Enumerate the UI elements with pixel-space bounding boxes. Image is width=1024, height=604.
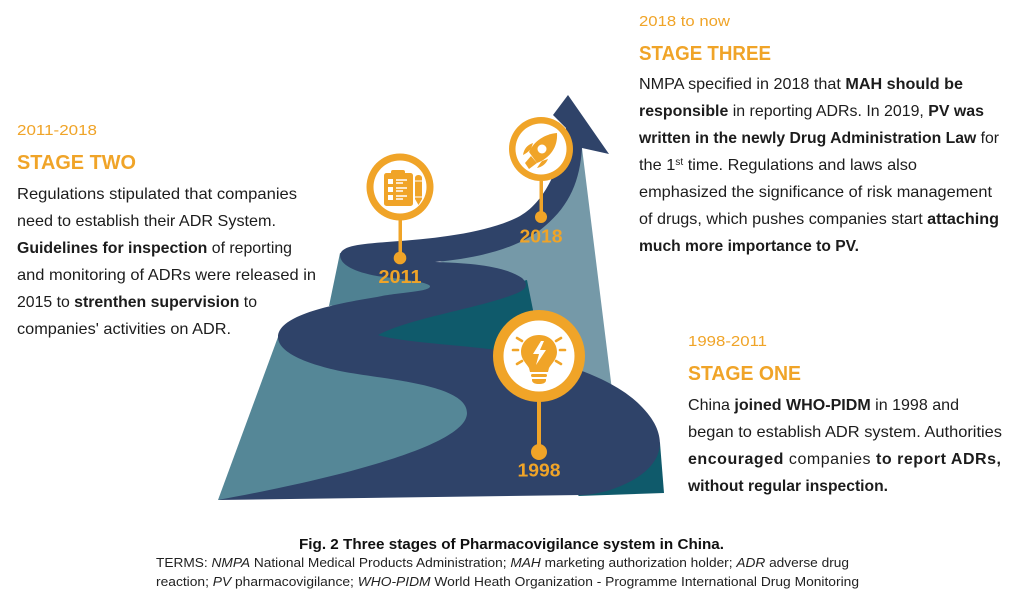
figure caption: TERMS: NMPA National Medical Products Administration; MAH marketing authorization holder; ADR adverse drug: [156, 555, 849, 570]
figure caption: Fig. 2 Three stages of Pharmacovigilance system in China.: [299, 537, 724, 553]
stage one text: without regular inspection.: [687, 478, 888, 495]
stage three text: the 1: [639, 157, 675, 174]
back light slope: [440, 148, 612, 390]
pin: 2018 rocket: [509, 117, 573, 223]
stage two text: companies' activities on ADR.: [17, 321, 231, 338]
stage one text: 1998-2011: [688, 333, 767, 350]
stage three text: emphasized the significance of risk management: [639, 184, 993, 201]
year labels: 2011: [378, 267, 422, 287]
year labels: [378, 226, 562, 480]
icon: light bulb: [513, 335, 565, 384]
road illustration: [218, 95, 664, 500]
winding road with arrow: [218, 95, 660, 500]
stage one text: encouraged companies to report ADRs,: [688, 451, 1001, 468]
stage two text: [17, 122, 316, 338]
dark teal right slope: [578, 430, 664, 496]
upper left teal slope: [329, 253, 440, 306]
stage one text: China joined WHO-PIDM in 1998 and: [688, 397, 959, 414]
pin: 2011 clipboard: [366, 154, 434, 264]
year labels: 2018: [520, 226, 562, 246]
stage two text: Regulations stipulated that companies: [17, 186, 297, 203]
lower left teal slope: [218, 337, 490, 500]
stage two text: STAGE TWO: [17, 152, 136, 174]
stage three text: 2018 to now: [639, 13, 730, 30]
stage one text: [687, 333, 1002, 495]
stage two text: and monitoring of ADRs were released in: [17, 267, 316, 284]
dark teal middle slope: [370, 280, 545, 362]
stage three text: STAGE THREE: [639, 43, 771, 65]
stage three text: NMPA specified in 2018 that MAH should be: [639, 76, 963, 93]
pin: 1998 bulb: [493, 310, 585, 460]
stage three text: responsible in reporting ADRs. In 2019, PV was: [639, 103, 984, 120]
stage three text: st: [675, 157, 683, 168]
stage three text: much more importance to PV.: [639, 238, 859, 255]
stage two text: Guidelines for inspection of reporting: [17, 240, 292, 257]
stage three text: [638, 13, 1000, 255]
year labels: 1998: [518, 460, 560, 480]
stage three text: written in the newly Drug Administration Law for: [638, 130, 1000, 147]
stage three text: time. Regulations and laws also: [683, 157, 917, 174]
stage two text: 2011-2018: [17, 122, 97, 139]
figure caption: [156, 537, 859, 589]
icon: clipboard and pencil: [384, 170, 422, 206]
icon: rocket: [523, 133, 557, 169]
stage three text: of drugs, which pushes companies start attaching: [639, 211, 999, 228]
stage one text: STAGE ONE: [688, 363, 801, 385]
stage one text: began to establish ADR system. Authorities: [688, 424, 1002, 441]
figure caption: reaction; PV pharmacovigilance; WHO-PIDM World Heath Organization - Programme International Drug Monitoring: [156, 574, 859, 589]
stage two text: 2015 to strenthen supervision to: [17, 294, 257, 311]
stage two text: need to establish their ADR System.: [17, 213, 276, 230]
